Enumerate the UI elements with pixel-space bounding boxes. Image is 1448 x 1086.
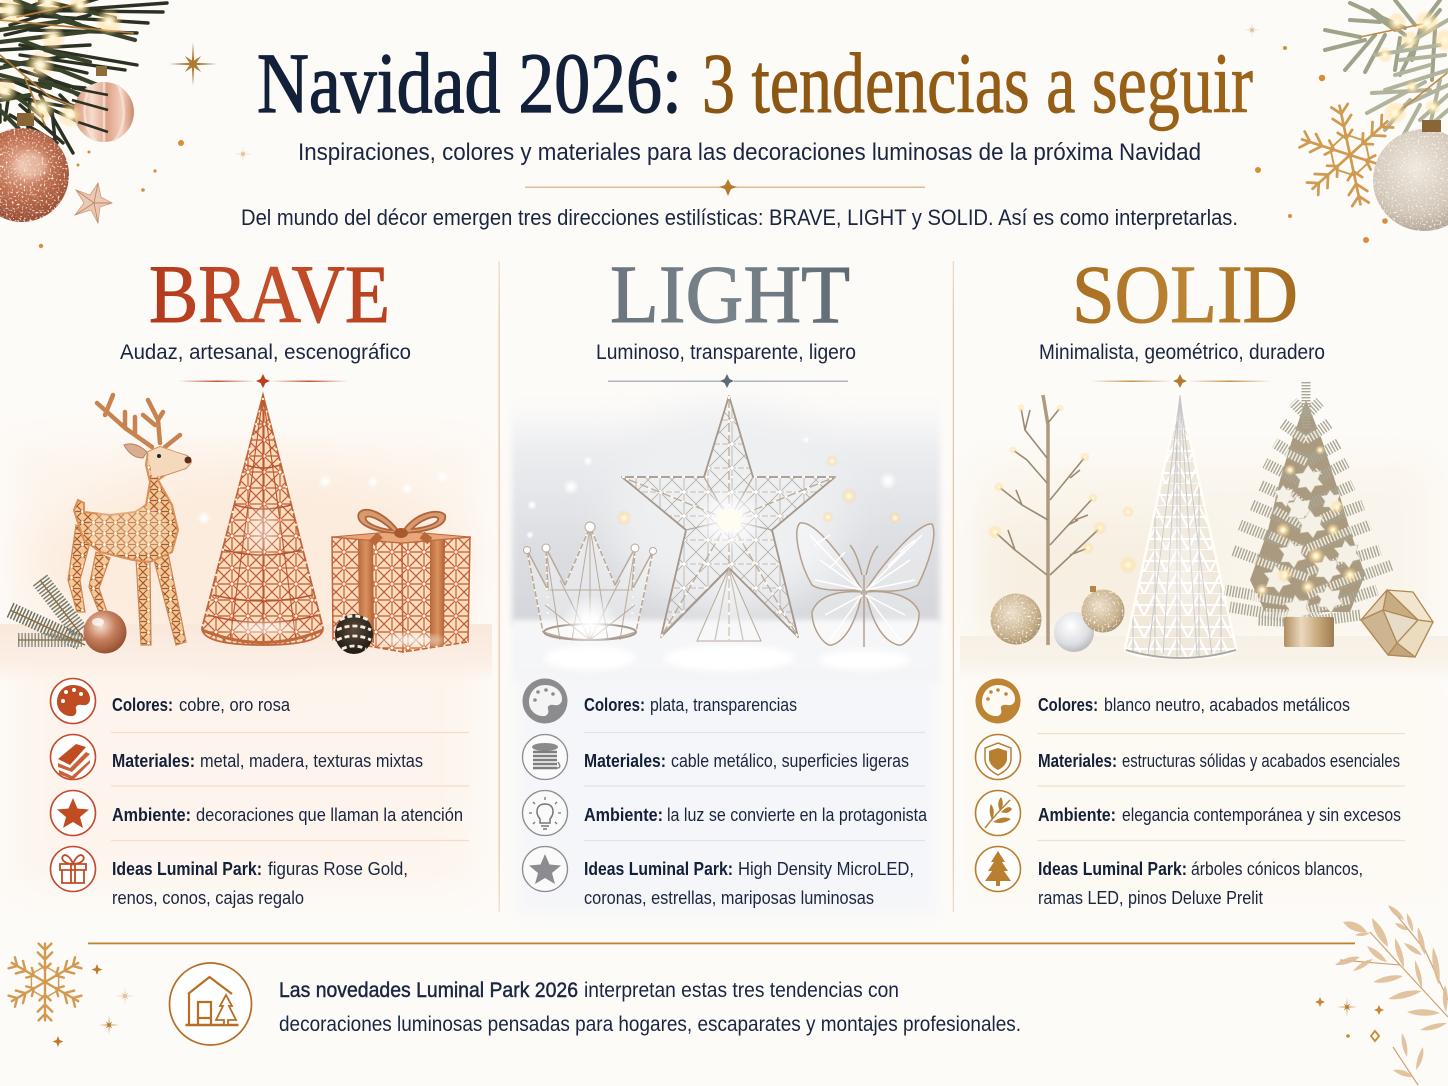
champagne bauble left: [990, 594, 1042, 644]
reindeer figure: [68, 395, 192, 645]
illustration: BRAVE scene: [10, 395, 470, 654]
icon: metallic star: [75, 183, 112, 223]
item: ideas: Ideas Luminal Park:: [584, 859, 733, 879]
footer text: decoraciones luminosas pensadas para hogares, escaparates y montajes profesionales.: [279, 1013, 1021, 1036]
copper bauble: [84, 610, 126, 654]
heading: LIGHT: LIGHT: [610, 248, 850, 340]
item: ambiente: [50, 790, 463, 836]
footer text: Las novedades Luminal Park 2026: [279, 979, 578, 1002]
intro text: Del mundo del décor emergen tres direcciones estilísticas: BRAVE, LIGHT y SOLID. Así es como interpretarlas.: [241, 205, 1238, 230]
pine sprig: [10, 580, 85, 645]
decoration: top sparkles and confetti: [39, 22, 1388, 248]
heading: SOLID: SOLID: [1072, 248, 1298, 340]
panel background: brave: [0, 440, 492, 890]
item: ambiente: elegancia contemporánea y sin excesos: [1122, 805, 1401, 825]
copper glitter bauble: [0, 113, 69, 222]
pinecone: [335, 614, 373, 654]
item: ambiente: Ambiente:: [584, 805, 663, 825]
tagline: SOLID: Minimalista, geométrico, duradero: [1039, 341, 1325, 364]
item: ideas: High Density MicroLED,: [738, 859, 914, 879]
illustration: LIGHT scene: [524, 396, 934, 671]
item: materiales: Materiales:: [112, 751, 195, 771]
item: colores: [976, 678, 1350, 724]
divider: SOLID: [1090, 374, 1272, 388]
footer text: [279, 979, 1021, 1036]
flocked prelit pine tree: [1225, 382, 1392, 647]
item: ideas: ramas LED, pinos Deluxe Prelit: [1038, 888, 1263, 908]
footer rule: [88, 942, 1355, 944]
panel background: light: [512, 392, 940, 916]
item: materiales: metal, madera, texturas mixtas: [200, 751, 423, 771]
white bauble: [1054, 612, 1094, 652]
divider: BRAVE: [178, 374, 348, 388]
tagline: LIGHT: Luminoso, transparente, ligero: [596, 341, 856, 364]
footer text: interpretan estas tres tendencias con: [584, 979, 899, 1002]
item: materiales: Materiales:: [584, 751, 666, 771]
column separators: [498, 261, 954, 912]
panel background: solid: [960, 460, 1448, 900]
wire crown: [524, 522, 656, 650]
white lit cone tree: [1125, 395, 1236, 658]
item: materiales: Materiales:: [1038, 751, 1117, 771]
wire cone tree: [202, 395, 323, 645]
tagline: BRAVE: Audaz, artesanal, escenográfico: [120, 341, 411, 364]
sparkles: [197, 471, 448, 525]
item: materiales: [976, 734, 1400, 780]
subtitle: Inspiraciones, colores y materiales para las decoraciones luminosas de la próxima Navidad: [298, 139, 1201, 166]
item: ideas: figuras Rose Gold,: [268, 859, 408, 879]
wire gift box: [332, 510, 470, 652]
title: Navidad 2026:: [257, 35, 682, 131]
title: 3 tendencias a seguir: [702, 35, 1253, 131]
item: ambiente: [522, 790, 928, 836]
item: ideas: [50, 846, 408, 908]
champagne bauble right: [1082, 586, 1124, 632]
item: ideas: renos, conos, cajas regalo: [112, 888, 304, 908]
item: ideas: coronas, estrellas, mariposas luminosas: [584, 888, 874, 908]
icon: gold snowflake: [1292, 96, 1408, 214]
list: SOLID: [976, 678, 1405, 908]
item: ambiente: la luz se convierte en la protagonista: [667, 805, 928, 825]
geometric faceted ornament: [1361, 590, 1433, 657]
sparkles: [526, 436, 901, 539]
illustration: SOLID scene: [988, 382, 1433, 658]
item: colores: Colores:: [1038, 695, 1098, 715]
header divider: [525, 179, 925, 196]
item: ambiente: Ambiente:: [112, 805, 191, 825]
item: colores: [50, 678, 291, 724]
decoration: top-left pine branch with baubles: [0, 0, 167, 223]
item: ideas: Ideas Luminal Park:: [1038, 859, 1187, 879]
item: ambiente: decoraciones que llaman la atención: [196, 805, 463, 825]
bare LED branch tree: [988, 395, 1137, 645]
icon: footer snowflake: [8, 944, 82, 1020]
item: materiales: [50, 734, 423, 780]
pink striped bauble: [57, 66, 134, 142]
reflections on floor: [545, 645, 910, 671]
decoration: footer-right leaves: [1315, 905, 1448, 1085]
branch lights: [1377, 10, 1448, 125]
decoration: footer-left sparkles: [52, 964, 135, 1047]
item: ideas: [976, 846, 1363, 908]
wire butterfly: [797, 523, 934, 647]
item: materiales: [522, 734, 909, 780]
icon: house with tree: [170, 963, 252, 1045]
item: ideas: árboles cónicos blancos,: [1191, 859, 1363, 879]
item: colores: Colores:: [112, 695, 173, 715]
item: colores: Colores:: [584, 695, 645, 715]
divider: LIGHT: [608, 374, 848, 388]
item: ambiente: Ambiente:: [1038, 805, 1116, 825]
sage pine needles: [1325, 0, 1448, 147]
pine needles: [0, 0, 167, 153]
item: colores: plata, transparencias: [650, 695, 797, 715]
branch lights: [0, 0, 123, 122]
wire star: [622, 396, 835, 641]
list: BRAVE: [50, 678, 469, 908]
item: colores: cobre, oro rosa: [179, 695, 291, 715]
item: materiales: cable metálico, superficies ligeras: [671, 751, 909, 771]
item: colores: blanco neutro, acabados metálicos: [1104, 695, 1350, 715]
item: ambiente: [976, 790, 1401, 836]
decoration: top-right branch, snowflake and bauble: [1292, 0, 1448, 231]
item: ideas: Ideas Luminal Park:: [112, 859, 262, 879]
title: [257, 35, 1253, 131]
item: colores: [522, 678, 797, 724]
heading: BRAVE: BRAVE: [149, 248, 390, 340]
list: LIGHT: [522, 678, 928, 908]
silver glitter bauble: [1373, 120, 1448, 231]
item: ideas: [522, 846, 914, 908]
